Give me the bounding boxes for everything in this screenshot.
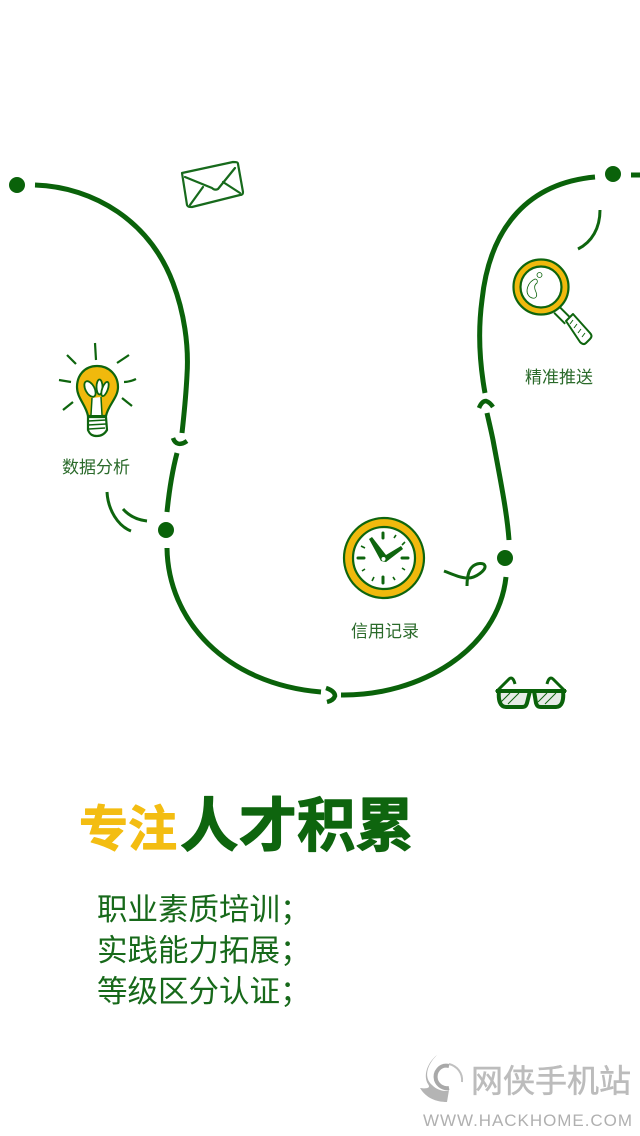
route segment 4 (341, 577, 506, 695)
watermark (420, 1055, 632, 1130)
title: 专注 (79, 803, 177, 857)
title (79, 794, 414, 859)
route segment 2 (167, 453, 177, 512)
icon: light bulb (59, 343, 136, 436)
icon: clock (344, 518, 424, 598)
body text: 等级区分认证； (97, 975, 310, 1009)
decorative loop near clock (444, 563, 485, 586)
decorative arcs near lower-left dot (107, 492, 147, 531)
clock hands (369, 537, 403, 562)
watermark url: WWW.HACKHOME.COM (423, 1111, 632, 1130)
chevron marker 2 (326, 688, 335, 702)
body text (97, 893, 310, 1009)
icon: envelope (182, 162, 243, 207)
body text: 职业素质培训； (97, 893, 310, 927)
label: data analysis: 数据分析 (62, 458, 130, 477)
chevron marker 1 (173, 438, 187, 444)
decorative arc near upper-right dot (578, 210, 600, 249)
winding route path (35, 175, 640, 702)
label: credit record: 信用记录 (351, 622, 419, 641)
chevron marker 3 (479, 401, 493, 408)
bulb rays (59, 343, 136, 410)
route segment 5 (487, 413, 509, 540)
icon: glasses (496, 678, 566, 707)
route tail dash (631, 172, 640, 178)
route segment 6 (480, 177, 595, 393)
label: precise delivery: 精准推送 (525, 368, 593, 387)
icon: magnifying glass (514, 260, 592, 344)
route segment 1 (35, 185, 187, 433)
watermark text: 网侠手机站 (471, 1063, 631, 1099)
watermark logo (420, 1055, 462, 1102)
route segment 3 (167, 548, 321, 692)
body text: 实践能力拓展； (97, 934, 310, 968)
title: 人才积累 (180, 794, 414, 859)
route dots (9, 166, 621, 566)
